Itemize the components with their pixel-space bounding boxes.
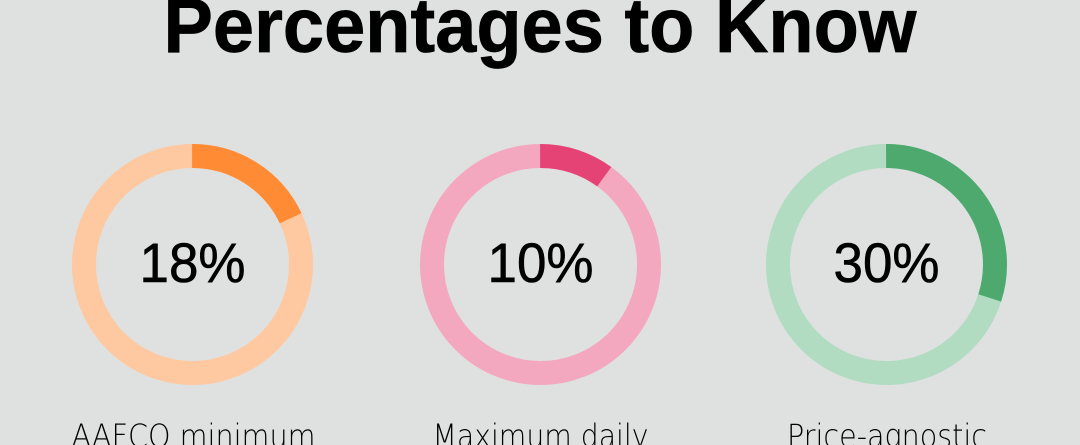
value: 10%: 10%: [488, 231, 594, 294]
panel: Price-agnostic: [778, 156, 995, 445]
panel: AAFCO minimum: [72, 156, 316, 445]
value: 30%: 30%: [834, 231, 940, 294]
donut chart: 30%: [778, 156, 995, 373]
panel: Maximum daily: [432, 156, 649, 445]
donut chart: 10%: [432, 156, 649, 373]
value: 18%: 18%: [140, 231, 246, 294]
donut chart: 18%: [84, 156, 301, 373]
